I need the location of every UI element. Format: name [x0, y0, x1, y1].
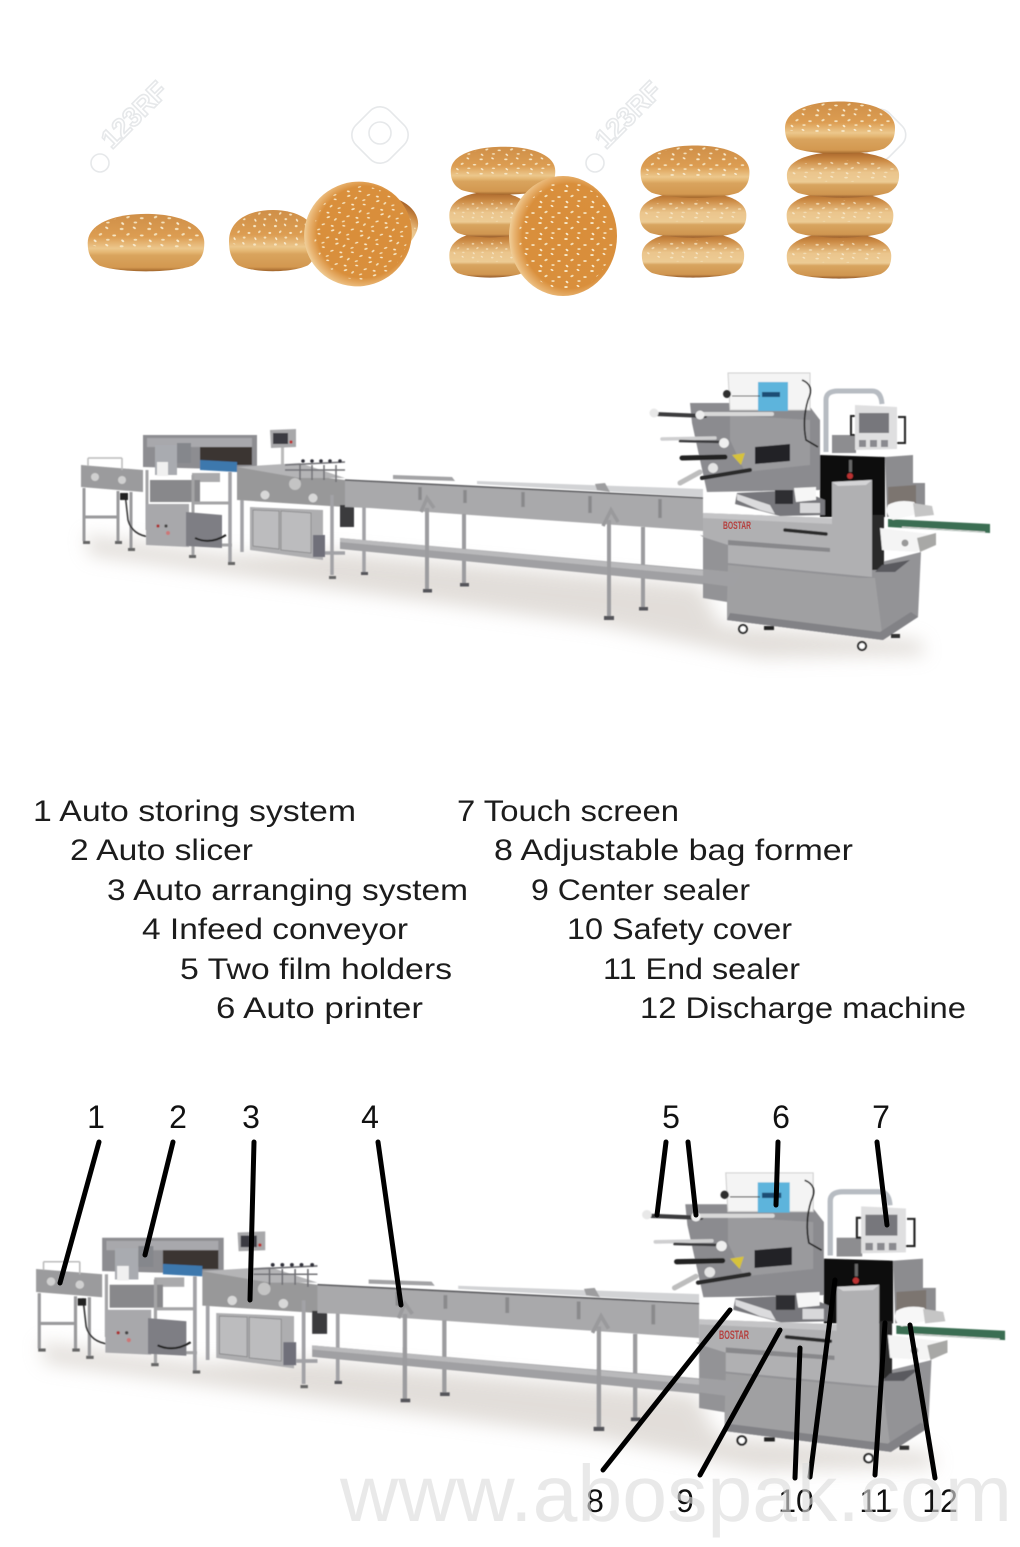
part list column right: 10 Safety cover: [567, 913, 792, 946]
annotated machine photo: [36, 1173, 1005, 1471]
callout numbers: 4: [361, 1099, 379, 1135]
callout lines: [60, 1142, 935, 1478]
part list column left: 5 Two film holders: [180, 953, 452, 986]
brand logo: BOSTAR: [723, 520, 751, 532]
part list column right: 11 End sealer: [603, 953, 800, 986]
part list column left: 1 Auto storing system: [33, 795, 356, 828]
bun group: two buns: [229, 168, 426, 300]
callout numbers: 12: [922, 1483, 958, 1519]
watermark: stock photo marks: 123RF: [95, 76, 174, 154]
part list column left: 4 Infeed conveyor: [142, 913, 408, 946]
callout numbers: 7: [872, 1099, 890, 1135]
part list column right: 12 Discharge machine: [640, 992, 966, 1025]
part list column left: [33, 795, 468, 1025]
part list column left: 3 Auto arranging system: [107, 874, 468, 907]
part list column left: 2 Auto slicer: [70, 834, 253, 867]
brand logo: BOSTAR: [719, 1330, 749, 1342]
callout numbers: 5: [662, 1099, 680, 1135]
bun group: three-high with front bun: [449, 147, 617, 296]
part list column left: 6 Auto printer: [216, 992, 423, 1025]
part list column right: 8 Adjustable bag former: [494, 834, 853, 867]
callout numbers: [87, 1099, 958, 1519]
bun stack: three: [640, 146, 749, 278]
part list column right: 9 Center sealer: [531, 874, 750, 907]
watermark: stock photo marks: 123RF: [589, 76, 668, 154]
callout numbers: 1: [87, 1099, 105, 1135]
panel: burger buns row: [88, 76, 911, 300]
watermark: stock photo marks: [91, 76, 911, 172]
parts list: [33, 795, 966, 1025]
callout numbers: 2: [169, 1099, 187, 1135]
callout numbers: 10: [778, 1483, 814, 1519]
part list column right: [457, 795, 966, 1025]
bun stack: four: [785, 102, 899, 279]
part list column right: 7 Touch screen: [457, 795, 679, 828]
callout numbers: 11: [859, 1483, 893, 1519]
bun: single: [88, 214, 204, 271]
watermark: website: www.abospak.com: [339, 1449, 1012, 1538]
callout numbers: 8: [586, 1483, 604, 1519]
callout numbers: 3: [242, 1099, 260, 1135]
callout numbers: 9: [676, 1483, 694, 1519]
machine photo: full production line: [81, 373, 990, 658]
callout numbers: 6: [772, 1099, 790, 1135]
